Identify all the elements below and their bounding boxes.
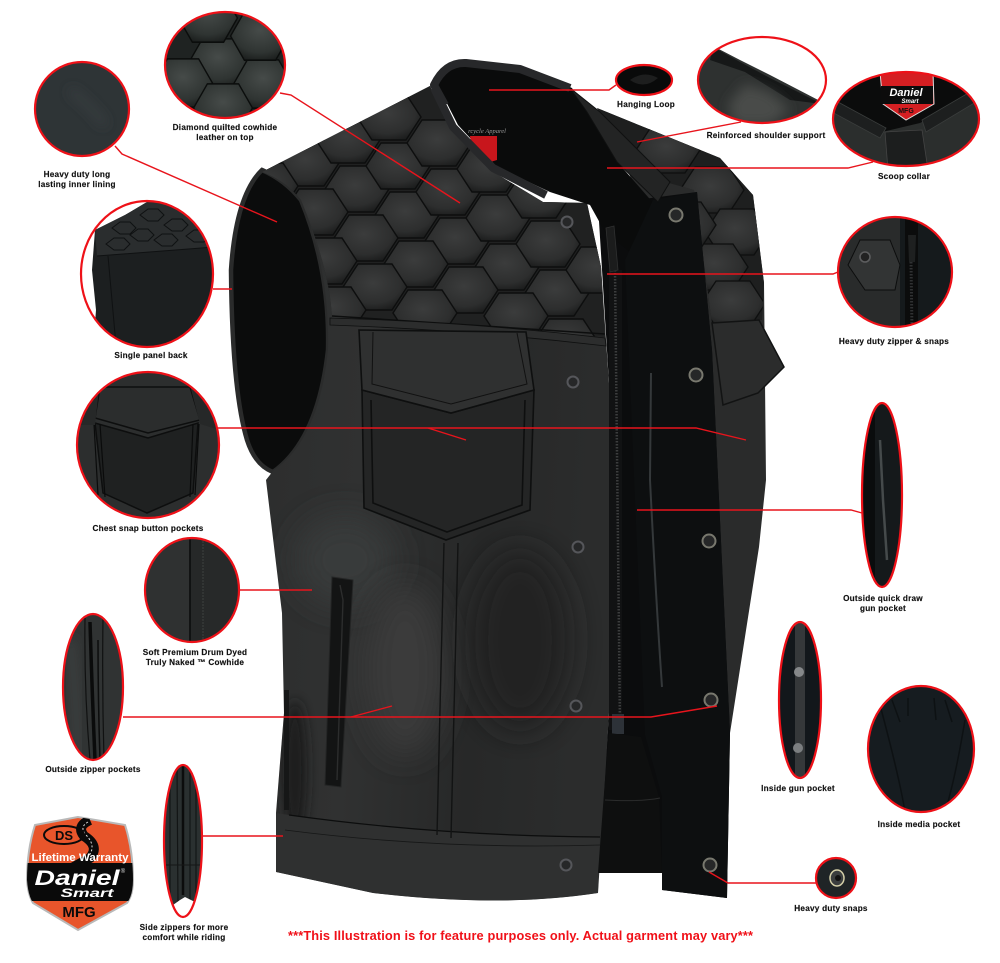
brand name: Daniel — [34, 867, 121, 890]
chest pocket body — [362, 390, 534, 540]
mini logo second line: Smart — [901, 99, 920, 105]
DS oval — [44, 826, 84, 844]
front pocket zipper — [325, 577, 353, 787]
detail circle — [816, 858, 856, 898]
label: Soft Premium Drum Dyed — [143, 648, 247, 657]
callout: chest pockets — [77, 372, 746, 533]
leader line — [489, 85, 616, 90]
label: comfort while riding — [142, 933, 226, 942]
disclaimer: ***This Illustration is for feature purposes only. Actual garment may vary*** — [288, 928, 753, 943]
label: Heavy duty zipper & snaps — [839, 337, 949, 346]
yoke seam band — [330, 318, 606, 346]
leader line — [637, 510, 862, 513]
warranty text: Lifetime Warranty — [32, 852, 129, 864]
armhole — [231, 170, 328, 472]
callout: inside media pocket — [868, 686, 974, 829]
callout: quick draw pocket — [637, 403, 923, 613]
label: Outside zipper pockets — [45, 765, 141, 774]
callout: heavy duty snaps — [709, 858, 868, 913]
leather shading — [276, 515, 600, 900]
detail circle — [838, 215, 960, 330]
label: Inside media pocket — [878, 820, 960, 829]
brand script: rcycle Apparel — [468, 128, 506, 135]
label: gun pocket — [860, 604, 906, 613]
callout: soft cowhide — [143, 535, 312, 667]
callout: reinforced shoulder — [637, 37, 826, 142]
label: leather on top — [196, 133, 254, 142]
label: Chest snap button pockets — [92, 524, 204, 533]
logo: Daniel Smart lifetime warranty shield: DS — [55, 828, 73, 843]
label: Single panel back — [114, 351, 188, 360]
leader line — [637, 122, 741, 142]
label: Side zippers for more — [140, 923, 229, 932]
leader line — [115, 146, 277, 222]
detail circle — [868, 686, 974, 812]
right collar band — [570, 88, 670, 202]
label: Hanging Loop — [617, 100, 675, 109]
neck tag — [468, 128, 506, 163]
detail circle — [616, 65, 672, 95]
right quilted yoke — [597, 108, 764, 322]
detail circle — [77, 372, 220, 518]
logo: Daniel Smart lifetime warranty shield — [20, 817, 140, 930]
callout: scoop collar — [607, 72, 985, 181]
leader branch — [351, 706, 392, 717]
leader line — [213, 288, 232, 290]
dark backing behind zipper and placket — [598, 192, 730, 898]
main zipper — [606, 226, 624, 734]
leader line — [709, 872, 817, 883]
label: Outside quick draw — [843, 594, 923, 603]
detail circle — [63, 614, 123, 760]
front left panel — [262, 86, 609, 900]
detail circle — [690, 37, 826, 130]
inside pocket edge — [650, 373, 662, 687]
callout: side zippers — [140, 765, 283, 942]
callout: zipper and snaps — [607, 215, 960, 346]
MFG: MFG — [62, 904, 96, 921]
detail circle — [164, 765, 205, 925]
leader branch — [428, 428, 466, 440]
callout: inner lining — [35, 62, 277, 222]
road graphic — [72, 820, 94, 868]
inner lining at neck — [436, 60, 655, 260]
right chest pocket flap — [712, 320, 784, 405]
callout: outside zipper pockets — [45, 614, 717, 774]
right back panel of vest — [597, 108, 766, 733]
label: Heavy duty snaps — [794, 904, 868, 913]
leader line — [123, 706, 717, 717]
detail circle — [779, 622, 821, 778]
leader line — [218, 428, 746, 440]
detail circle — [145, 535, 240, 645]
leader line — [607, 162, 873, 168]
illustration: leather vest — [231, 60, 784, 900]
callout: quilted leather — [154, 0, 460, 203]
brand second line: Smart — [60, 886, 115, 900]
snap buttons — [560, 208, 718, 872]
callout: single panel back — [81, 200, 232, 360]
mini logo name: Daniel — [889, 87, 923, 99]
leader line — [238, 589, 312, 591]
leader line — [280, 93, 460, 203]
mini logo MFG: MFG — [898, 108, 914, 115]
lower opening with lining — [598, 733, 662, 873]
label: Truly Naked ™ Cowhide — [146, 658, 244, 667]
detail circle — [830, 72, 985, 170]
label: Heavy duty long — [44, 170, 110, 179]
leader line — [202, 835, 283, 837]
detail circle — [164, 10, 286, 120]
label: Scoop collar — [878, 172, 931, 181]
registered mark: ® — [121, 868, 126, 875]
black fabric placket — [625, 192, 730, 898]
quilted hexagon yoke — [267, 86, 605, 337]
label: Reinforced shoulder support — [707, 131, 825, 140]
detail circle — [81, 200, 215, 350]
detail circle — [862, 403, 902, 587]
left collar band — [434, 63, 570, 195]
label: Diamond quilted cowhide — [173, 123, 278, 132]
chest pocket flap — [359, 330, 534, 413]
detail circle — [35, 62, 129, 156]
label: lasting inner lining — [38, 180, 116, 189]
callout: inside gun pocket — [761, 622, 835, 793]
label: Inside gun pocket — [761, 784, 835, 793]
callout: hanging loop — [489, 65, 675, 109]
leader line — [607, 272, 838, 274]
